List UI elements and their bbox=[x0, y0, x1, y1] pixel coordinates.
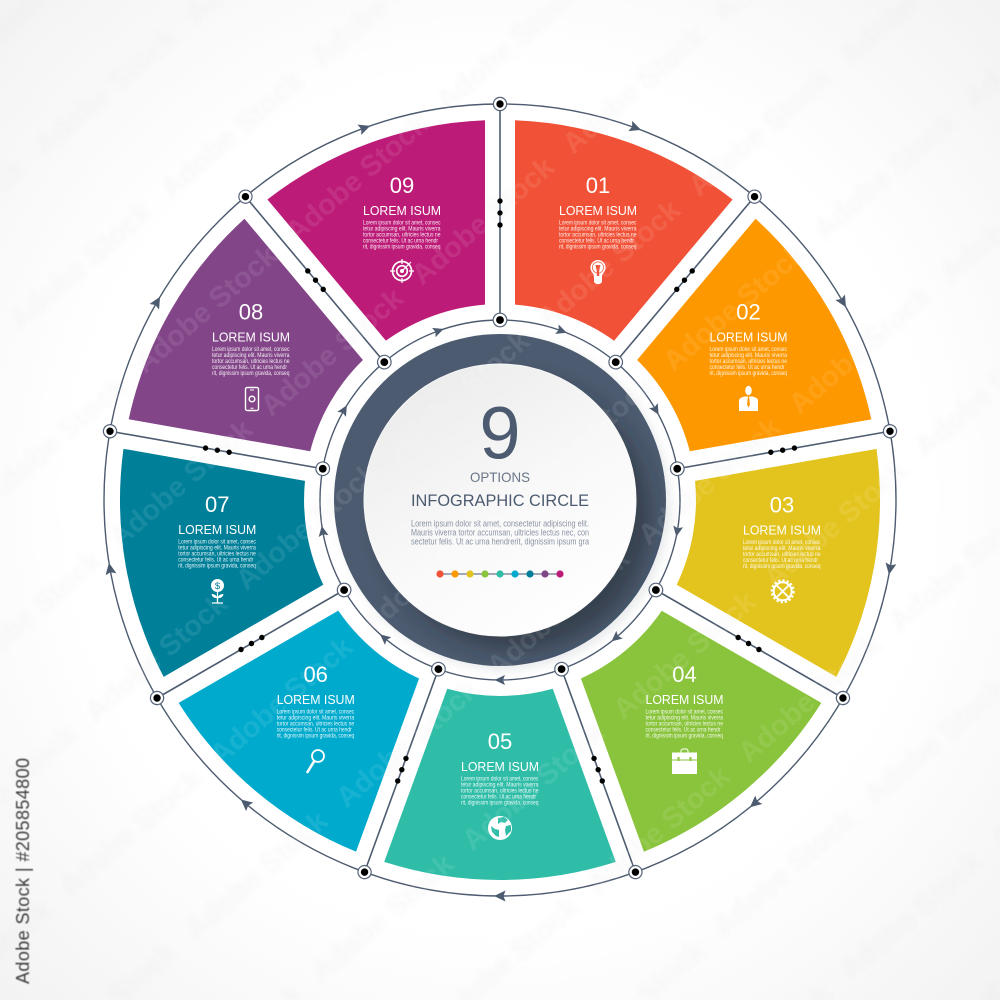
text block 07: tortor accumsan, ultricies lectus ne bbox=[178, 552, 256, 558]
text block 01 bbox=[559, 173, 637, 251]
text block 01: Lorem ipsum dolor sit amet, consec bbox=[559, 220, 636, 226]
text block 02: Lorem ipsum dolor sit amet, consec bbox=[710, 347, 787, 353]
text block 06: consectetur felis. Ut ac urna hendr bbox=[277, 728, 352, 734]
text block 08: 08 bbox=[239, 300, 263, 324]
text block 08 bbox=[212, 300, 290, 377]
text block 03: tortor accumsan, ultricies lectus ne bbox=[743, 552, 821, 558]
text block 01: tetur adipiscing elit. Mauris viverra bbox=[559, 226, 637, 232]
icon: gear bbox=[772, 581, 793, 602]
text block 01: consectetur felis. Ut ac urna hendr bbox=[559, 238, 634, 244]
text block 06 bbox=[277, 662, 355, 740]
text block 09: tetur adipiscing elit. Mauris viverra bbox=[363, 226, 441, 232]
segment 05 bbox=[336, 655, 616, 936]
text block 06: 06 bbox=[303, 662, 328, 687]
text block 07: 07 bbox=[205, 492, 230, 517]
icon: money plant: $ bbox=[215, 581, 221, 592]
text block 02: tortor accumsan, ultricies lectus ne bbox=[710, 359, 788, 365]
text block 04: tortor accumsan, ultricies lectus ne bbox=[646, 722, 724, 728]
text block 08: rit, dignissim ipsum gravida, conseq bbox=[212, 371, 290, 377]
segment 03 bbox=[659, 449, 914, 701]
text block 03: consectetur felis. Ut ac urna hendr bbox=[743, 558, 818, 564]
text block 05 bbox=[461, 729, 539, 807]
spokes with nodes bbox=[102, 97, 898, 881]
icon: smartphone bbox=[246, 388, 258, 410]
text block 06: rit, dignissim ipsum gravida, conseq bbox=[277, 734, 354, 740]
text block 07: rit, dignissim ipsum gravida, conseq bbox=[178, 564, 256, 570]
outer ring line bbox=[104, 104, 896, 896]
text block 02: rit, dignissim ipsum gravida, conseq bbox=[710, 371, 787, 377]
icon: light bulb bbox=[590, 260, 606, 284]
hub outer soft shadow bbox=[338, 338, 670, 670]
text block 04: 04 bbox=[672, 662, 697, 687]
color timeline dots bbox=[436, 570, 564, 578]
text block 05: tetur adipiscing elit. Mauris viverra bbox=[461, 782, 539, 788]
segment 07 bbox=[55, 378, 355, 677]
text block 04: Lorem ipsum dolor sit amet, consec bbox=[646, 709, 723, 715]
text block 05: tortor accumsan, ultricies lectus ne bbox=[461, 788, 539, 794]
icon: target bbox=[390, 259, 414, 283]
text block 06: LOREM ISUM bbox=[277, 692, 355, 707]
center paragraph: sectetur felis. Ut ac urna hendrerit, dignissim ipsum gra bbox=[411, 536, 589, 546]
text block 07: LOREM ISUM bbox=[178, 522, 256, 537]
text block 07: consectetur felis. Ut ac urna hendr bbox=[178, 558, 253, 564]
text block 09: rit, dignissim ipsum gravida, conseq bbox=[363, 245, 440, 251]
segment 09 bbox=[267, 60, 576, 368]
text block 03 bbox=[743, 492, 821, 570]
arrows on rings bbox=[104, 121, 896, 901]
center hub bbox=[334, 334, 670, 670]
text block 03: 03 bbox=[770, 492, 794, 518]
text block 03: Lorem ipsum dolor sit amet, consec bbox=[743, 540, 820, 546]
segment 06 bbox=[152, 570, 431, 852]
text block 01: tortor accumsan, ultricies lectus ne bbox=[559, 232, 637, 238]
text block 02: 02 bbox=[736, 300, 761, 324]
text block 03: rit, dignissim ipsum gravida, conseq bbox=[743, 564, 820, 570]
ring inner shadow bbox=[382, 382, 650, 650]
text block 09: 09 bbox=[390, 173, 414, 198]
text block 01: 01 bbox=[586, 173, 610, 198]
text block 07: tetur adipiscing elit. Mauris viverra bbox=[178, 545, 256, 551]
text block 06: Lorem ipsum dolor sit amet, consec bbox=[277, 709, 354, 715]
text block 08: tortor accumsan, ultricies lectus ne bbox=[212, 359, 290, 365]
options label: OPTIONS bbox=[470, 469, 530, 485]
text block 09: Lorem ipsum dolor sit amet, consec bbox=[363, 220, 440, 226]
text block 03: LOREM ISUM bbox=[743, 522, 821, 538]
dark ring bbox=[334, 334, 666, 666]
text block 07: Lorem ipsum dolor sit amet, consec bbox=[178, 539, 256, 545]
text block 09 bbox=[363, 173, 441, 251]
segment icons bbox=[211, 259, 793, 840]
center paragraph: Mauris viverra tortor accumsan, ultricies lectus nec, con bbox=[411, 528, 589, 538]
center paragraph bbox=[411, 518, 589, 546]
center paragraph: Lorem ipsum dolor sit amet, consectetur adipiscing elit. bbox=[411, 518, 589, 528]
text block 02: consectetur felis. Ut ac urna hendr bbox=[710, 365, 784, 371]
text block 08: tetur adipiscing elit. Mauris viverra bbox=[212, 353, 290, 359]
text block 07 bbox=[178, 492, 256, 570]
inner ring line bbox=[320, 320, 680, 680]
center heading: INFOGRAPHIC CIRCLE bbox=[411, 491, 589, 510]
text block 03: tetur adipiscing elit. Mauris viverra bbox=[743, 546, 821, 552]
segment 04 bbox=[522, 593, 821, 891]
text block 04: consectetur felis. Ut ac urna hendr bbox=[646, 728, 720, 734]
text block 05: consectetur felis. Ut ac urna hendr bbox=[461, 794, 536, 800]
icon: person bbox=[739, 386, 758, 411]
text block 04: LOREM ISUM bbox=[646, 692, 724, 707]
segment 08 bbox=[129, 205, 384, 458]
text block 06: tetur adipiscing elit. Mauris viverra bbox=[277, 715, 355, 721]
big number 9: 9 bbox=[479, 392, 521, 474]
text block 05: LOREM ISUM bbox=[461, 759, 539, 774]
segment 01 bbox=[515, 120, 733, 341]
white disc bbox=[364, 364, 636, 636]
icon: money plant bbox=[211, 579, 224, 603]
stock id vertical text: Adobe Stock | #205854800 bbox=[13, 758, 33, 984]
text block 02: LOREM ISUM bbox=[710, 330, 788, 344]
text block 09: LOREM ISUM bbox=[363, 203, 441, 218]
icon: globe bbox=[488, 816, 512, 840]
text block 06: tortor accumsan, ultricies lectus ne bbox=[277, 722, 355, 728]
text block 04 bbox=[646, 662, 724, 740]
text block 01: rit, dignissim ipsum gravida, conseq bbox=[559, 245, 636, 251]
text block 04: tetur adipiscing elit. Mauris viverra bbox=[646, 715, 724, 721]
text block 09: consectetur felis. Ut ac urna hendr bbox=[363, 238, 438, 244]
text block 09: tortor accumsan, ultricies lectus ne bbox=[363, 232, 441, 238]
text block 01: LOREM ISUM bbox=[559, 203, 637, 218]
text block 02 bbox=[710, 300, 788, 377]
text block 04: rit, dignissim ipsum gravida, conseq bbox=[646, 734, 723, 740]
text block 05: 05 bbox=[488, 729, 512, 754]
text block 08: consectetur felis. Ut ac urna hendr bbox=[212, 365, 287, 371]
icon: briefcase bbox=[672, 749, 697, 774]
text block 05: Lorem ipsum dolor sit amet, consec bbox=[461, 776, 538, 782]
text block 08: LOREM ISUM bbox=[212, 330, 290, 344]
segment 02 bbox=[614, 219, 922, 527]
segment text blocks bbox=[178, 173, 821, 807]
text block 05: rit, dignissim ipsum gravida, conseq bbox=[461, 801, 538, 807]
text block 02: tetur adipiscing elit. Mauris viverra bbox=[710, 353, 788, 359]
text block 08: Lorem ipsum dolor sit amet, consec bbox=[212, 347, 290, 353]
segments bbox=[55, 60, 922, 936]
icon: magnifier bbox=[308, 750, 324, 772]
